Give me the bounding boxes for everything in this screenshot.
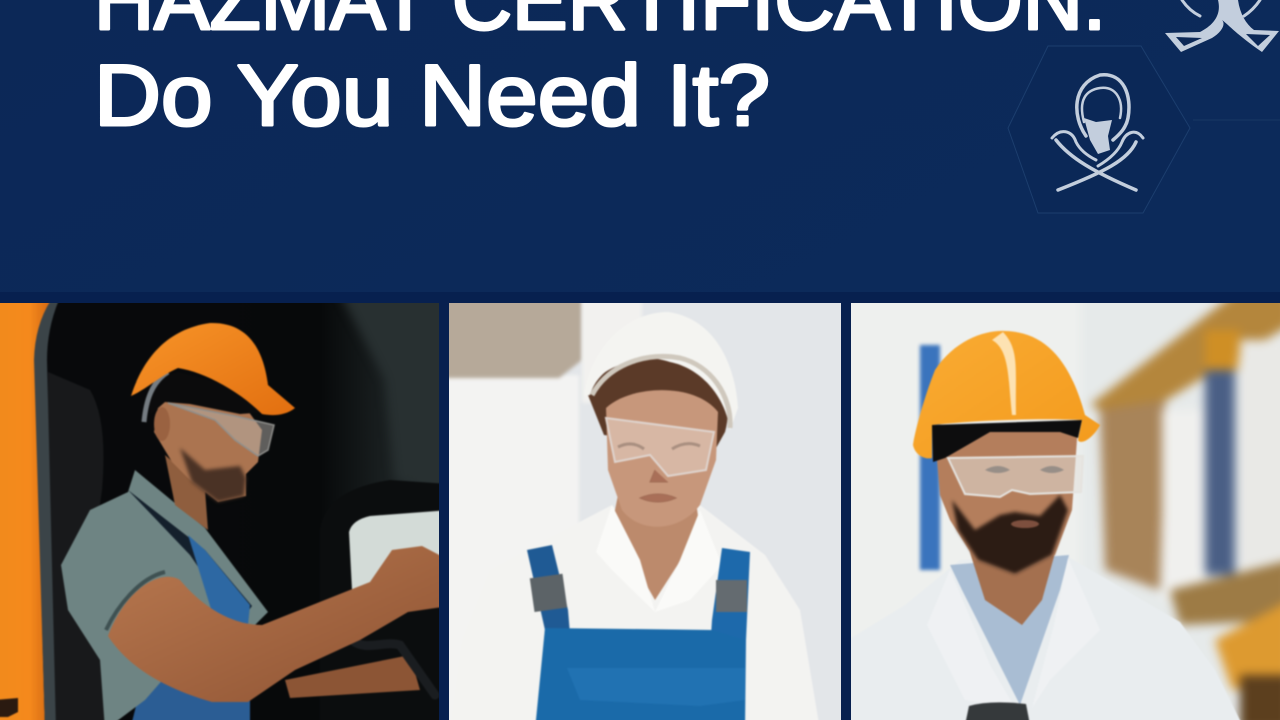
left strap — [527, 545, 578, 720]
mouth — [1011, 520, 1039, 528]
bib — [535, 628, 745, 720]
hair and headband — [157, 394, 250, 415]
wall column — [582, 293, 642, 403]
face — [154, 395, 262, 502]
helmet highlight — [992, 332, 1016, 415]
overall bib — [188, 535, 250, 625]
neck — [612, 495, 700, 600]
panel: female worker photo — [439, 293, 851, 720]
icon: hexagon with respirator mask — [1008, 46, 1280, 213]
safety glasses — [168, 403, 274, 456]
white hard hat — [587, 312, 738, 420]
white wall — [439, 375, 579, 720]
hat band and hair — [932, 420, 1082, 462]
door logo fragment — [0, 698, 18, 717]
hat brim shadow — [592, 356, 730, 428]
door frame — [33, 303, 58, 720]
blurred pale shelves — [841, 293, 1081, 720]
eyes — [985, 466, 1064, 473]
beard — [952, 495, 1068, 574]
orange truck door — [0, 303, 50, 720]
cab right side pillar — [342, 303, 409, 478]
face — [934, 425, 1078, 575]
face — [606, 390, 718, 527]
shirt — [579, 506, 818, 720]
warehouse background — [841, 293, 1280, 720]
nose and mouth — [640, 470, 676, 502]
upper arm and forearm — [108, 546, 449, 702]
eyes — [618, 444, 700, 449]
hard hat — [131, 323, 295, 415]
steering wheel — [352, 640, 435, 695]
neck — [165, 455, 208, 530]
cab interior — [46, 303, 406, 720]
seat — [48, 372, 105, 720]
shirt — [61, 470, 268, 720]
overalls lower — [132, 681, 251, 720]
helmet suspension strap — [144, 372, 168, 422]
hair — [588, 357, 728, 450]
icon: cropped second respirator mask — [1165, 0, 1279, 52]
panel: lab coat worker photo — [841, 293, 1280, 720]
ear — [154, 407, 170, 441]
buckle right — [716, 580, 747, 612]
blue column — [920, 345, 940, 570]
blurred rack frame — [1090, 293, 1280, 720]
coat lapels — [927, 558, 1100, 708]
handheld device — [964, 702, 1031, 720]
safety glasses — [948, 456, 1083, 497]
beard — [180, 448, 246, 502]
right strap — [705, 548, 750, 720]
blue shirt — [950, 555, 1069, 705]
dark band behind photos — [0, 292, 1280, 720]
buckle left — [530, 574, 567, 612]
ceiling beam — [449, 303, 583, 380]
overall strap — [128, 490, 252, 610]
neck — [966, 535, 1060, 625]
lab coat — [845, 555, 1245, 720]
title — [94, 0, 1106, 144]
panel: truck driver photo — [0, 293, 449, 720]
lower forearm — [285, 655, 420, 698]
shirt sleeve hem — [106, 572, 165, 630]
white paper — [349, 510, 449, 590]
door panel — [357, 480, 439, 720]
safety glasses — [606, 418, 714, 476]
title: Do You Need It? — [94, 48, 770, 144]
shirt collar — [610, 510, 702, 588]
bib pocket — [567, 668, 745, 706]
orange hard hat — [913, 331, 1100, 458]
bright background — [555, 303, 841, 720]
